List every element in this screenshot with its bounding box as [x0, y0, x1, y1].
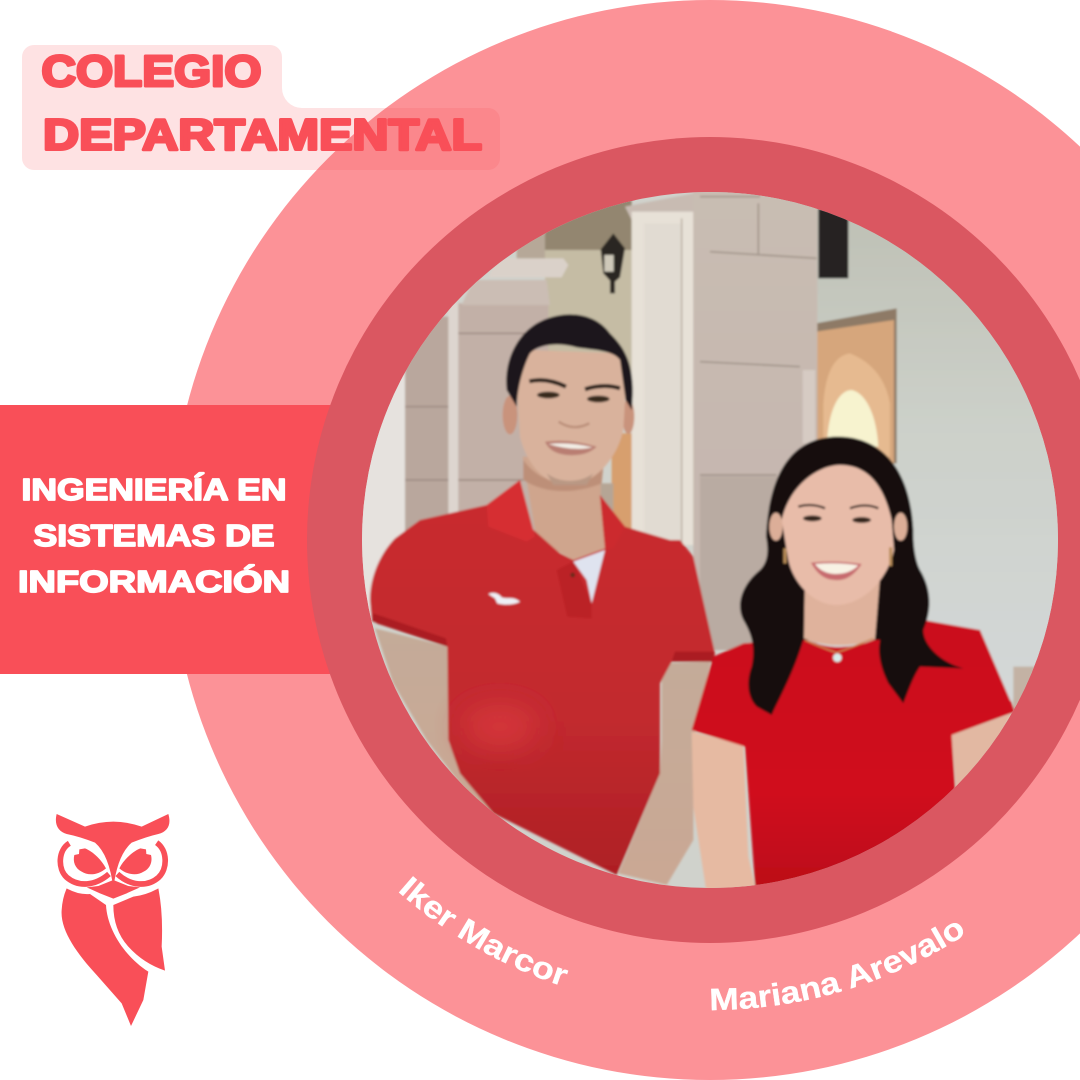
man shirt [370, 480, 715, 875]
middle dark ring [307, 137, 1080, 943]
woman shirt [692, 620, 1015, 907]
wall lamp [601, 233, 625, 293]
background left colonnade [360, 193, 720, 623]
banner text: Ingeniería en Sistemas de Información: INGENIERÍA EN [22, 472, 286, 507]
man arms [375, 628, 497, 817]
name label: Mariana Arevalo: Mariana Arevalo [711, 923, 964, 1010]
banner text: Ingeniería en Sistemas de Información [18, 472, 290, 599]
woman neck and face [804, 577, 880, 645]
woman [692, 437, 1015, 907]
woman arms [692, 732, 755, 893]
icon: red owl logo [56, 814, 169, 1026]
woman hair [740, 437, 963, 715]
man neck [523, 457, 605, 560]
title: Colegio Departamental [42, 47, 482, 160]
banner text: Ingeniería en Sistemas de Información: INFORMACIÓN [18, 563, 290, 599]
necklace [805, 638, 873, 653]
background right wall and pillar [693, 190, 1067, 717]
title: Colegio Departamental: COLEGIO [42, 47, 262, 96]
title: Colegio Departamental: DEPARTAMENTAL [43, 110, 482, 160]
man head [503, 396, 517, 434]
program banner [0, 405, 345, 674]
name label: Iker Marcor: Iker Marcor [398, 876, 568, 985]
banner text: Ingeniería en Sistemas de Información: SISTEMAS DE [34, 518, 274, 553]
photo: two students in front of colonnade [360, 190, 1067, 907]
man [370, 314, 715, 885]
title background tab [22, 45, 500, 170]
